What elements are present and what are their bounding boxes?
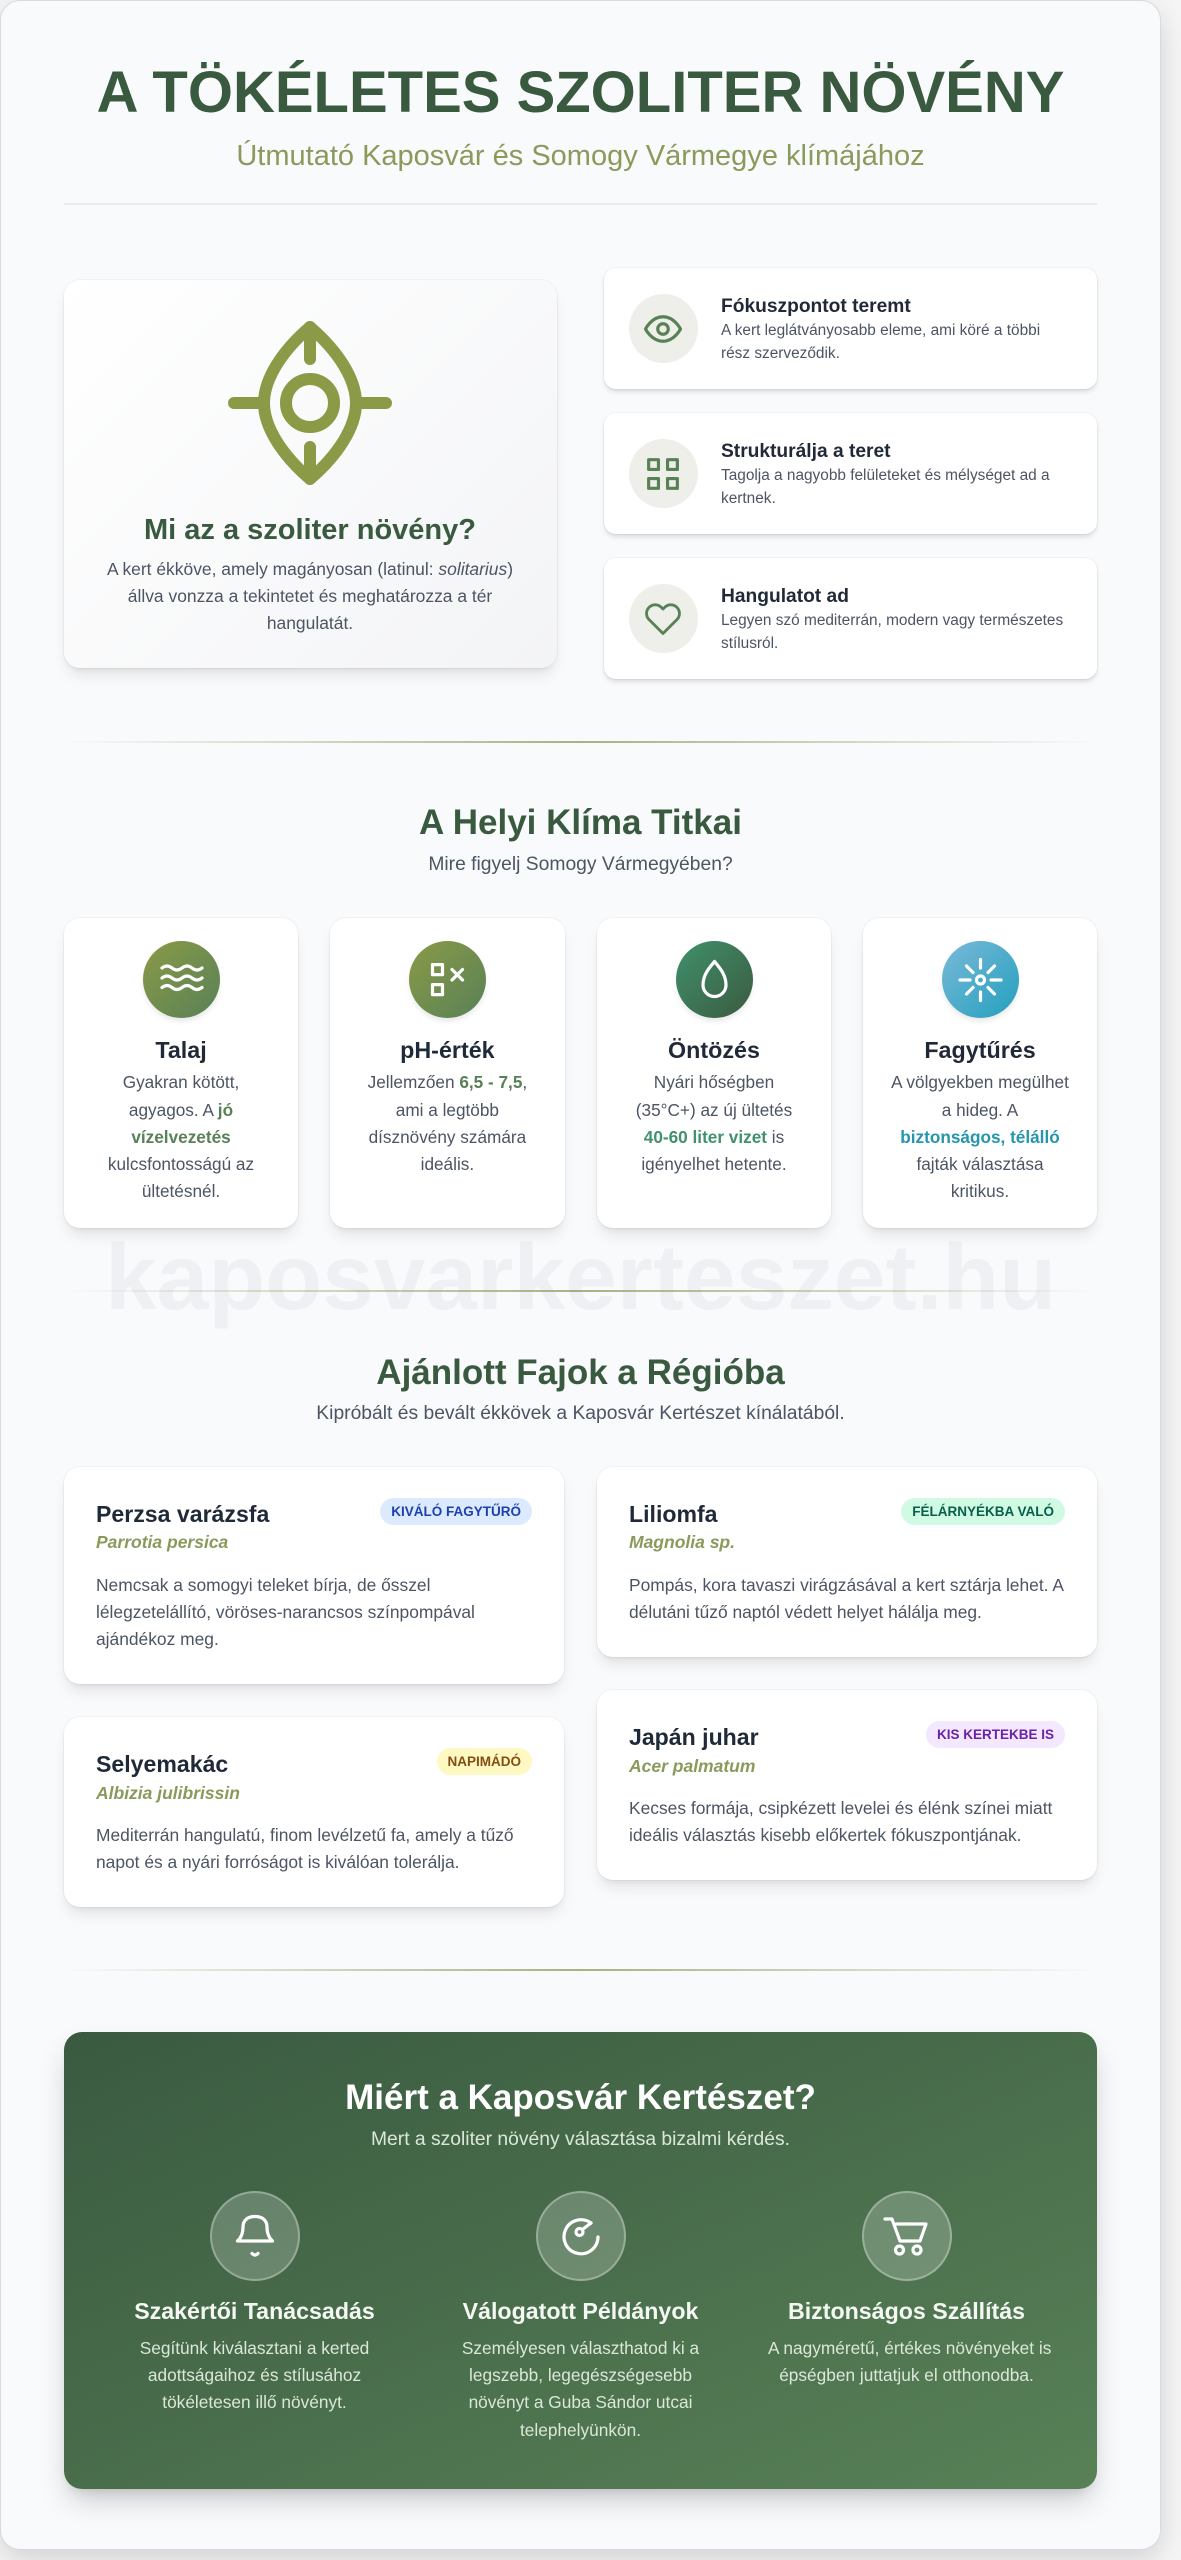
panel: sets mood bbox=[604, 558, 1097, 679]
card title: Talaj bbox=[155, 1037, 207, 1063]
icon: solitary plant leaf-eye bbox=[228, 321, 392, 485]
card text: fajták választása bbox=[916, 1154, 1044, 1174]
card text: biztonságos, télálló bbox=[900, 1127, 1060, 1147]
description: délutáni tűző naptól védett helyet hálálja meg. bbox=[629, 1602, 982, 1622]
panel: Japanese maple bbox=[597, 1690, 1097, 1880]
latin name: Albizia julibrissin bbox=[96, 1783, 240, 1803]
card text: Gyakran kötött, bbox=[123, 1072, 239, 1092]
panel: soil bbox=[64, 918, 298, 1228]
species name: Liliomfa bbox=[629, 1501, 718, 1527]
section subheading: local climate: Mire figyelj Somogy Vármegyében? bbox=[428, 854, 733, 875]
card text: kertnek. bbox=[721, 490, 776, 507]
card text bbox=[721, 322, 1040, 362]
panel: why Kaposvár Kertészet bbox=[64, 2032, 1097, 2489]
badge: small gardens bbox=[926, 1721, 1065, 1748]
column title: Válogatott Példányok bbox=[463, 2298, 698, 2324]
column text: épségben juttatjuk el otthonodba. bbox=[779, 2365, 1034, 2385]
description: Nemcsak a somogyi teleket bírja, de ősszel bbox=[96, 1575, 430, 1595]
column text: adottságaihoz és stílusához bbox=[148, 2365, 361, 2385]
icon: bell bbox=[210, 2191, 300, 2281]
card text bbox=[636, 1072, 792, 1174]
column text: legszebb, legegészségesebb bbox=[469, 2365, 692, 2385]
card text: rész szerveződik. bbox=[721, 345, 840, 362]
icon: pH squares bbox=[409, 941, 486, 1018]
latin name: Acer palmatum bbox=[629, 1756, 755, 1776]
description bbox=[629, 1575, 1064, 1622]
panel: magnolia bbox=[597, 1466, 1097, 1657]
description: ajándékoz meg. bbox=[96, 1629, 219, 1649]
panel: structures space bbox=[604, 413, 1097, 534]
card text: Tagolja a nagyobb felületeket és mélységet ad a bbox=[721, 466, 1050, 484]
description bbox=[96, 1575, 475, 1649]
card text: stílusról. bbox=[721, 635, 778, 652]
card text: A kert leglátványosabb eleme, ami köré a többi bbox=[721, 322, 1040, 338]
column text: telephelyünkön. bbox=[520, 2420, 641, 2440]
section subheading: recommended species: Kipróbált és bevált ékkövek a Kaposvár Kertészet kínálatából. bbox=[316, 1403, 845, 1424]
card text: a hideg. A bbox=[942, 1100, 1018, 1120]
card text: kritikus. bbox=[951, 1181, 1009, 1201]
column text bbox=[140, 2338, 369, 2412]
species name: Perzsa varázsfa bbox=[96, 1501, 269, 1527]
panel: frost tolerance bbox=[863, 918, 1097, 1228]
subheading: Mert a szoliter növény választása bizalmi kérdés. bbox=[371, 2129, 790, 2150]
badge: partial shade bbox=[901, 1498, 1065, 1524]
column: expert advice bbox=[134, 2191, 375, 2412]
card text: A völgyekben megülhet bbox=[891, 1072, 1069, 1092]
description: Kecses formája, csipkézett levelei és élénk színei miatt bbox=[629, 1798, 1052, 1818]
card title: Hangulatot ad bbox=[721, 586, 849, 606]
description bbox=[629, 1798, 1052, 1845]
description: ideális választás kisebb előkertek fókuszpontjának. bbox=[629, 1825, 1021, 1845]
text: definition: A kert ékköve, amely magányosan (latinul: solitarius) bbox=[107, 558, 513, 578]
description: napot és a nyári forróságot is kiválóan tolerálja. bbox=[96, 1852, 459, 1872]
subtitle: Útmutató Kaposvár és Somogy Vármegye klímájához bbox=[236, 140, 925, 172]
icon: shopping cart bbox=[862, 2191, 952, 2281]
heading: Miért a Kaposvár Kertészet? bbox=[345, 2078, 816, 2117]
card text: Jellemzően 6,5 - 7,5, bbox=[368, 1072, 527, 1092]
badge: sun loving: NAPIMÁDÓ bbox=[448, 1754, 521, 1769]
description: Mediterrán hangulatú, finom levélzetű fa, amely a tűző bbox=[96, 1825, 514, 1845]
watermark: kaposvarkerteszet.hu bbox=[105, 1225, 1056, 1329]
description: lélegzetelállító, vöröses-narancsos színpompával bbox=[96, 1602, 475, 1622]
column text: Segítünk kiválasztani a kerted bbox=[140, 2338, 369, 2358]
panel: creates focal point bbox=[604, 268, 1097, 389]
description: Pompás, kora tavaszi virágzásával a kert sztárja lehet. A bbox=[629, 1575, 1064, 1595]
icon: target bbox=[536, 2191, 626, 2281]
text: definition: állva vonzza a tekintetet és meghatározza a tér bbox=[128, 586, 492, 606]
card title: Strukturálja a teret bbox=[721, 440, 891, 462]
section heading: recommended species: Ajánlott Fajok a Régióba bbox=[376, 1353, 785, 1392]
icon: frost bbox=[942, 941, 1018, 1018]
badge: frost hardy bbox=[380, 1498, 532, 1524]
column title: Biztonságos Szállítás bbox=[788, 2298, 1025, 2324]
column: selected specimens bbox=[462, 2191, 700, 2440]
card text bbox=[368, 1072, 527, 1174]
card text: igényelhet hetente. bbox=[641, 1154, 787, 1174]
card text: ültetésnél. bbox=[142, 1181, 220, 1201]
badge: frost hardy: KIVÁLÓ FAGYTŰRŐ bbox=[391, 1504, 521, 1518]
card title: Fagytűrés bbox=[924, 1037, 1036, 1063]
latin name: Magnolia sp. bbox=[629, 1532, 735, 1552]
icon: heart bbox=[628, 584, 698, 653]
panel: silk tree bbox=[64, 1717, 564, 1906]
panel: what is a solitary plant bbox=[64, 280, 556, 668]
panel: pH value bbox=[330, 918, 565, 1228]
card title: Öntözés bbox=[668, 1037, 760, 1063]
card text bbox=[721, 612, 1063, 652]
column text bbox=[768, 2338, 1051, 2385]
card text bbox=[891, 1072, 1069, 1201]
text: definition bbox=[107, 558, 513, 633]
icon: eye bbox=[628, 294, 698, 363]
column text bbox=[462, 2338, 700, 2440]
card text bbox=[108, 1072, 254, 1201]
column: safe delivery bbox=[768, 2191, 1051, 2385]
badge: partial shade: FÉLÁRNYÉKBA VALÓ bbox=[912, 1504, 1054, 1518]
card text: Nyári hőségben bbox=[654, 1072, 774, 1092]
card text: dísznövény számára bbox=[369, 1127, 526, 1147]
badge: small gardens: KIS KERTEKBE IS bbox=[937, 1727, 1054, 1742]
heading: what is it: Mi az a szoliter növény? bbox=[144, 514, 476, 546]
icon: grid bbox=[628, 439, 698, 508]
column text: növényt a Guba Sándor utcai bbox=[469, 2392, 692, 2412]
species name: Selyemakác bbox=[96, 1751, 228, 1777]
icon: water drop bbox=[676, 941, 752, 1018]
card text: ami a legtöbb bbox=[396, 1100, 499, 1120]
card text: ideális. bbox=[421, 1154, 474, 1174]
panel: irrigation bbox=[597, 918, 831, 1228]
column text: A nagyméretű, értékes növényeket is bbox=[768, 2338, 1051, 2358]
card title: Fókuszpontot teremt bbox=[721, 296, 911, 316]
column title: Szakértői Tanácsadás bbox=[134, 2298, 375, 2324]
card title: pH-érték bbox=[400, 1037, 495, 1063]
card text: (35°C+) az új ültetés bbox=[636, 1100, 792, 1120]
badge: sun loving bbox=[436, 1748, 532, 1775]
column text: tökéletesen illő növényt. bbox=[162, 2392, 347, 2412]
latin name: Parrotia persica bbox=[96, 1532, 228, 1552]
card text: agyagos. A jó bbox=[129, 1100, 233, 1120]
card text: vízelvezetés bbox=[131, 1127, 231, 1147]
card text: 40-60 liter vizet is bbox=[644, 1127, 784, 1147]
description bbox=[96, 1825, 514, 1872]
column text: Személyesen választhatod ki a bbox=[462, 2338, 699, 2358]
text: definition: hangulatát. bbox=[267, 613, 353, 633]
section heading: local climate: A Helyi Klíma Titkai bbox=[419, 803, 742, 842]
card text: kulcsfontosságú az bbox=[108, 1154, 254, 1174]
panel: Persian ironwood bbox=[64, 1466, 564, 1684]
title: A TÖKÉLETES SZOLITER NÖVÉNY bbox=[97, 60, 1064, 124]
icon: soil waves bbox=[142, 941, 220, 1018]
species name: Japán juhar bbox=[629, 1724, 759, 1750]
card text: Legyen szó mediterrán, modern vagy természetes bbox=[721, 612, 1063, 628]
card text bbox=[721, 466, 1050, 507]
